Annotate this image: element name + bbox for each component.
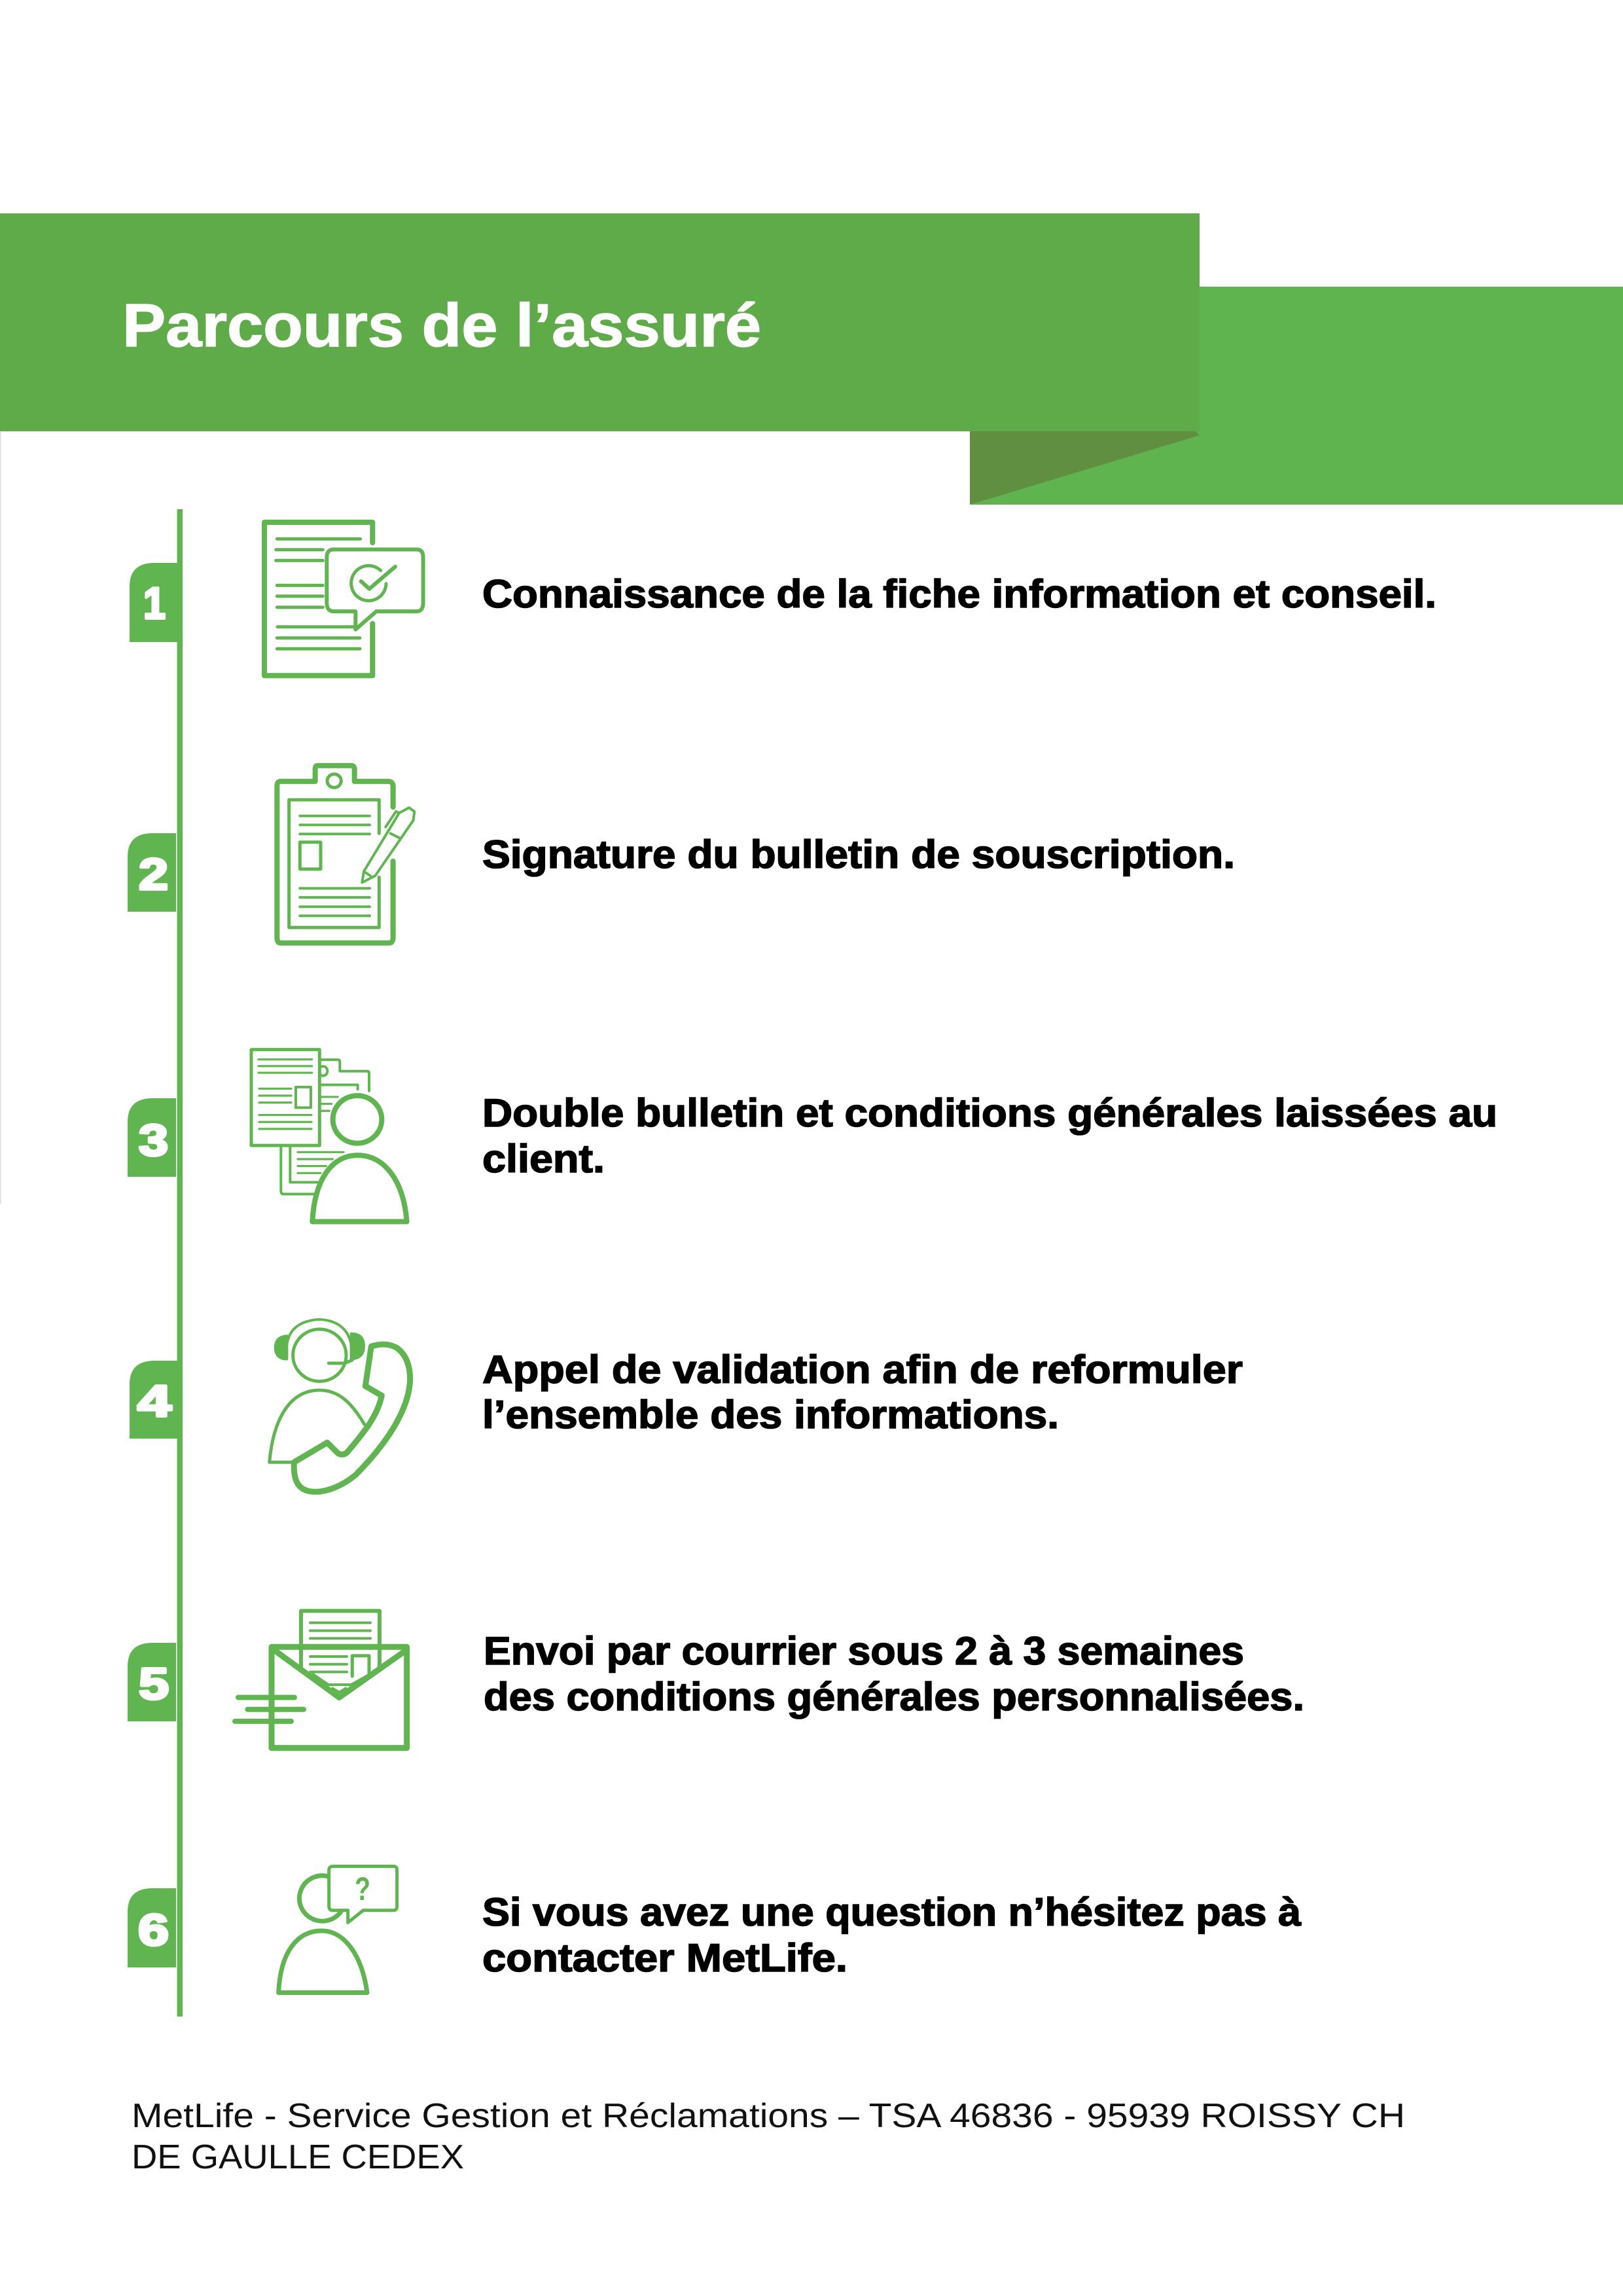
step 5 text: Envoi par courrier sous 2 à 3 semaines [484,1629,1244,1673]
step 3 text: Double bulletin et conditions générales laissées au [482,1091,1497,1135]
step 4 text: Appel de validation afin de reformuler [482,1348,1243,1391]
number tab 1: 1 [143,579,166,628]
number tab 3 [128,1098,176,1177]
step 4 text [482,1348,1243,1437]
footer address: DE GAULLE CEDEX [132,2138,464,2176]
icon: clipboard with pen [277,766,414,943]
number tab 6: 6 [138,1905,169,1955]
step 4 text: l’ensemble des informations. [482,1393,1059,1437]
step 6 text: Si vous avez une question n’hésitez pas à [482,1890,1302,1934]
banner: layered green ribbon with title [0,213,1623,505]
step 5 text [484,1629,1304,1719]
icon: person with question bubble: ? [355,1871,370,1907]
step 3 text [482,1091,1497,1181]
icon: agent with headset and phone [270,1319,410,1492]
number tab 2 [128,833,176,912]
step 5 [128,1611,1304,1748]
timeline vertical line [177,509,183,2017]
step 1 text: Connaissance de la fiche information et conseil. [482,572,1436,616]
number tab 3: 3 [139,1115,168,1165]
number tab 4 [130,1361,177,1439]
footer address: MetLife - Service Gestion et Réclamations – TSA 46836 - 95939 ROISSY CH [132,2097,1405,2135]
number tab 1 [130,563,177,642]
ribbon back panel [970,287,1623,505]
footer address [132,2097,1405,2176]
step 6 text [482,1890,1302,1980]
step 6 [128,1867,1302,1993]
step 1 [130,522,1436,675]
number tab 5 [128,1643,176,1721]
icon: envelope with letter [235,1611,407,1748]
title: Parcours de l’assuré [122,291,761,359]
step 3 [128,1050,1497,1222]
step 2 text: Signature du bulletin de souscription. [482,833,1235,876]
step 3 text: client. [482,1137,605,1181]
ribbon front panel [0,213,1200,431]
number tab 5: 5 [139,1659,169,1709]
number tab 2: 2 [139,850,168,899]
step 4 [130,1319,1243,1492]
number tab 4: 4 [137,1376,171,1426]
number tab 6 [128,1888,176,1967]
step 6 text: contacter MetLife. [482,1936,847,1980]
icon: documents and person [251,1050,407,1222]
icon: person with question bubble [279,1867,397,1993]
ribbon fold shadow [970,431,1200,505]
step 5 text: des conditions générales personnalisées. [484,1675,1304,1719]
step 2 [128,766,1235,943]
icon: document with check speech bubble [264,522,423,675]
